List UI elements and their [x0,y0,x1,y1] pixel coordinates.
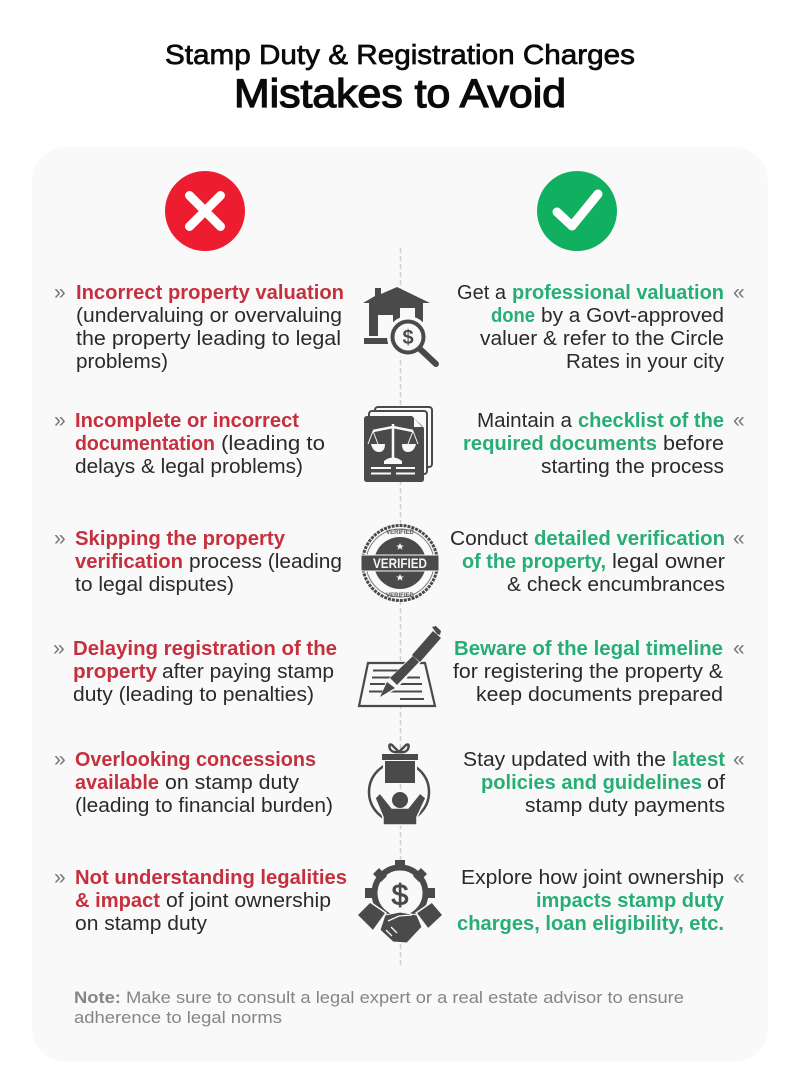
mistake 1: (undervaluing or overvaluing [76,305,342,327]
solution 5 [463,748,745,817]
solution 6: « [733,866,745,889]
mistake 6: » [54,866,66,889]
solution 1 [457,281,745,373]
solution 3: Conduct [450,528,528,550]
solution 4: keep documents prepared [476,684,723,706]
mistake 5: (leading to financial burden) [75,795,333,817]
icon: gift and person [369,744,429,825]
solution 2 [463,409,745,478]
icon: verified stamp: VERIFIED [386,593,415,599]
mistake 1 [54,281,344,373]
solution 1: professional valuation [512,282,724,304]
solution 3: & check encumbrances [507,574,725,596]
solution 5: Stay updated with the [463,749,666,771]
solution 6: Explore how joint ownership [461,867,724,889]
solution 6 [457,866,745,935]
mistake 5: Overlooking concessions [75,749,316,771]
mistake 5: on stamp duty [165,772,299,794]
solution 4: for registering the property & [453,661,724,683]
solution 1: « [733,281,745,304]
mistake 3: Skipping the property [75,528,286,550]
mistake 6: Not understanding legalities [75,867,347,889]
note: adherence to legal norms [74,1009,282,1027]
solution 4: « [733,637,745,660]
mistake 3: verification [75,551,183,573]
mistake 6: on stamp duty [75,913,207,935]
icon: verified stamp: VERIFIED [386,530,415,536]
mistake 2: Incomplete or incorrect [75,410,299,432]
solution 2: Maintain a [477,410,573,432]
solution 3: legal owner [612,551,725,573]
mistake 6: & impact [75,890,160,912]
note [74,989,684,1027]
mistake 6 [54,866,347,935]
solution 2: before [663,433,724,455]
solution 2: « [733,409,745,432]
icon: red cross [165,171,245,251]
solution 6: impacts stamp duty [536,890,725,912]
solution 1: valuer & refer to the Circle [480,328,724,350]
solution 3: « [733,527,745,550]
mistake 4: after paying stamp [162,661,334,683]
solution 5: of [707,772,725,794]
title [165,39,635,116]
mistake 3: to legal disputes) [75,574,234,596]
solution 5: stamp duty payments [525,795,725,817]
mistake 1: problems) [76,351,168,373]
mistake 4: duty (leading to penalties) [73,684,314,706]
mistake 2 [54,409,325,478]
icon: verified stamp: VERIFIED [373,555,427,571]
title: Mistakes to Avoid [234,72,566,116]
solution 1: done [491,305,535,327]
solution 5: policies and guidelines [481,772,702,794]
solution 3: of the property, [462,551,606,573]
solution 6: charges, loan eligibility, etc. [457,913,724,935]
mistake 2: » [54,409,66,432]
mistake 3: » [54,527,66,550]
mistake 3: process (leading [189,551,342,573]
mistake 2: (leading to [221,433,325,455]
solution 2: starting the process [541,456,724,478]
mistake 1: Incorrect property valuation [76,282,344,304]
icon: gear and handshake: $ [392,879,409,912]
mistake 2: delays & legal problems) [75,456,303,478]
mistake 1: the property leading to legal [76,328,341,350]
solution 5: « [733,748,745,771]
solution 5: latest [672,749,725,771]
mistake 5 [54,748,333,817]
mistake 1: » [54,281,66,304]
solution 3: detailed verification [534,528,725,550]
note: Note: Make sure to consult a legal expert or a real estate advisor to ensure [74,989,684,1007]
mistake 2: documentation [75,433,215,455]
title: Stamp Duty & Registration Charges [165,39,635,70]
mistake 3 [54,527,342,596]
icon: pen on document [359,626,441,706]
solution 4: Beware of the legal timeline [454,638,723,660]
mistake 6: of joint ownership [166,890,331,912]
icon: gear and handshake [357,860,443,943]
panel: comparison background [32,147,768,1062]
solution 1: Get a [457,282,507,304]
solution 1: Rates in your city [566,351,724,373]
solution 1: by a Govt-approved [541,305,724,327]
mistake 5: » [54,748,66,771]
icon: verified stamp [361,526,439,600]
solution 2: checklist of the [578,410,724,432]
mistake 4: property [73,661,158,683]
solution 2: required documents [463,433,657,455]
icon: green check [537,171,617,251]
icon: legal documents [364,407,432,482]
mistake 4 [53,637,337,706]
icon: house with magnifier: $ [402,327,414,349]
mistake 4: » [53,637,65,660]
icon: house with magnifier [363,287,436,364]
mistake 5: available [75,772,159,794]
mistake 4: Delaying registration of the [73,638,337,660]
solution 3 [450,527,745,596]
solution 4 [453,637,745,706]
